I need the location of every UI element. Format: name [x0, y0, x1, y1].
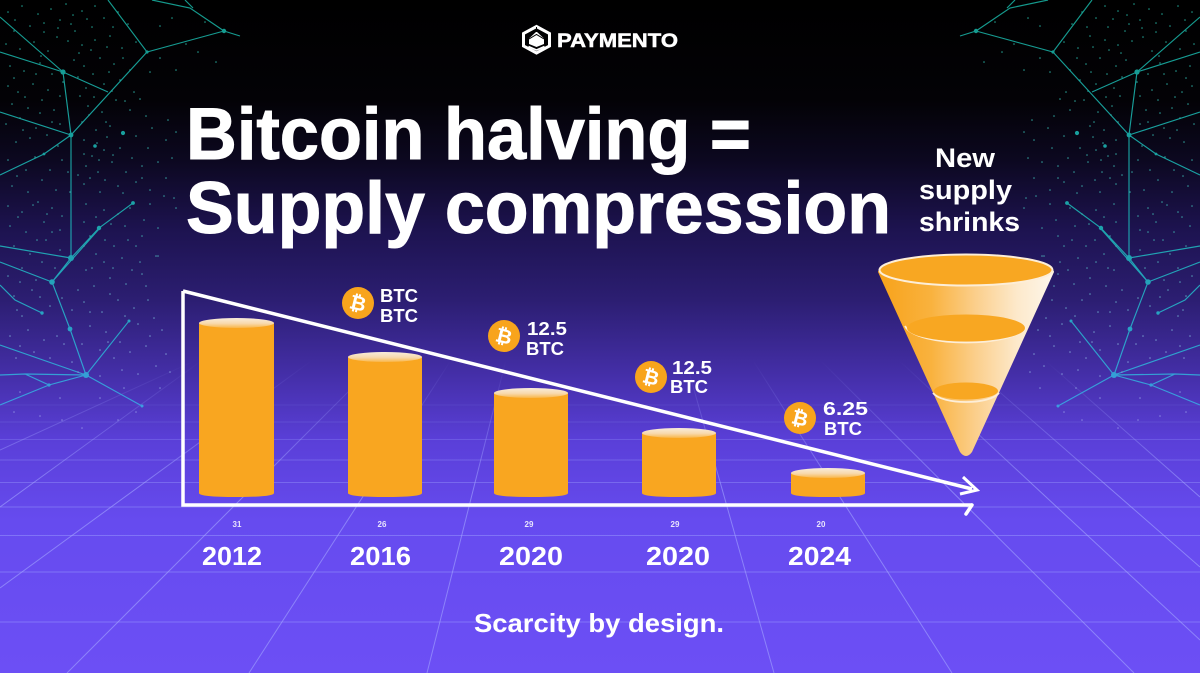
- reward callout 4: ₿: [789, 404, 811, 432]
- bar 2016: [348, 352, 422, 497]
- reward callout 3: ₿: [640, 363, 662, 391]
- bar 2020 second: [642, 428, 716, 497]
- year labels: 2020: [646, 541, 710, 571]
- funnel caption: [919, 143, 1020, 237]
- chart axes frame: [183, 291, 972, 505]
- reward callout 1: BTC: [380, 306, 418, 326]
- reward callout 2: BTC: [526, 339, 564, 359]
- brand name: PAYMENTO: [557, 31, 678, 52]
- year labels: 2020: [499, 541, 563, 571]
- small tick numbers: 26: [378, 520, 387, 529]
- funnel icon: [878, 254, 1054, 456]
- funnel caption: supply: [919, 175, 1012, 205]
- bar 2024: [791, 468, 865, 497]
- perspective floor grid: [0, 340, 1200, 673]
- network and star field: right: [960, 0, 1200, 428]
- title: Supply compression: [186, 168, 891, 249]
- bar 2012: [199, 318, 274, 497]
- reward callout 2: ₿: [493, 322, 515, 350]
- funnel caption: New: [935, 143, 996, 173]
- reward callout 3: [635, 358, 712, 397]
- reward callout 4: 6.25: [823, 399, 868, 419]
- title: Bitcoin halving =: [186, 94, 751, 175]
- funnel caption: shrinks: [919, 207, 1020, 237]
- small tick numbers: 29: [671, 520, 680, 529]
- year labels: 2024: [788, 541, 852, 571]
- year labels: [202, 541, 852, 571]
- year labels: 2012: [202, 541, 262, 571]
- small tick numbers: 29: [525, 520, 534, 529]
- reward callout 3: BTC: [670, 377, 708, 397]
- reward callout 1: BTC: [380, 286, 418, 306]
- reward callout 2: [488, 319, 567, 359]
- logo: Paymento: [524, 26, 678, 53]
- tagline: Scarcity by design.: [474, 608, 724, 638]
- year labels: 2016: [350, 541, 411, 571]
- title: [186, 94, 891, 249]
- reward callout 1: ₿: [347, 289, 369, 317]
- reward callout 2: 12.5: [527, 319, 567, 339]
- downward trend arrow: [183, 291, 977, 494]
- reward callout 3: 12.5: [672, 358, 712, 378]
- network and star field: left: [0, 0, 240, 428]
- icon: hexagon logo mark: [524, 26, 550, 53]
- reward callout 4: [784, 399, 868, 439]
- reward callout 1: [342, 286, 418, 326]
- small tick numbers: [233, 520, 826, 529]
- reward callout 4: BTC: [824, 419, 862, 439]
- small tick numbers: 31: [233, 520, 242, 529]
- bar 2020: [494, 388, 568, 497]
- axis arrowhead: [966, 505, 972, 514]
- small tick numbers: 20: [817, 520, 826, 529]
